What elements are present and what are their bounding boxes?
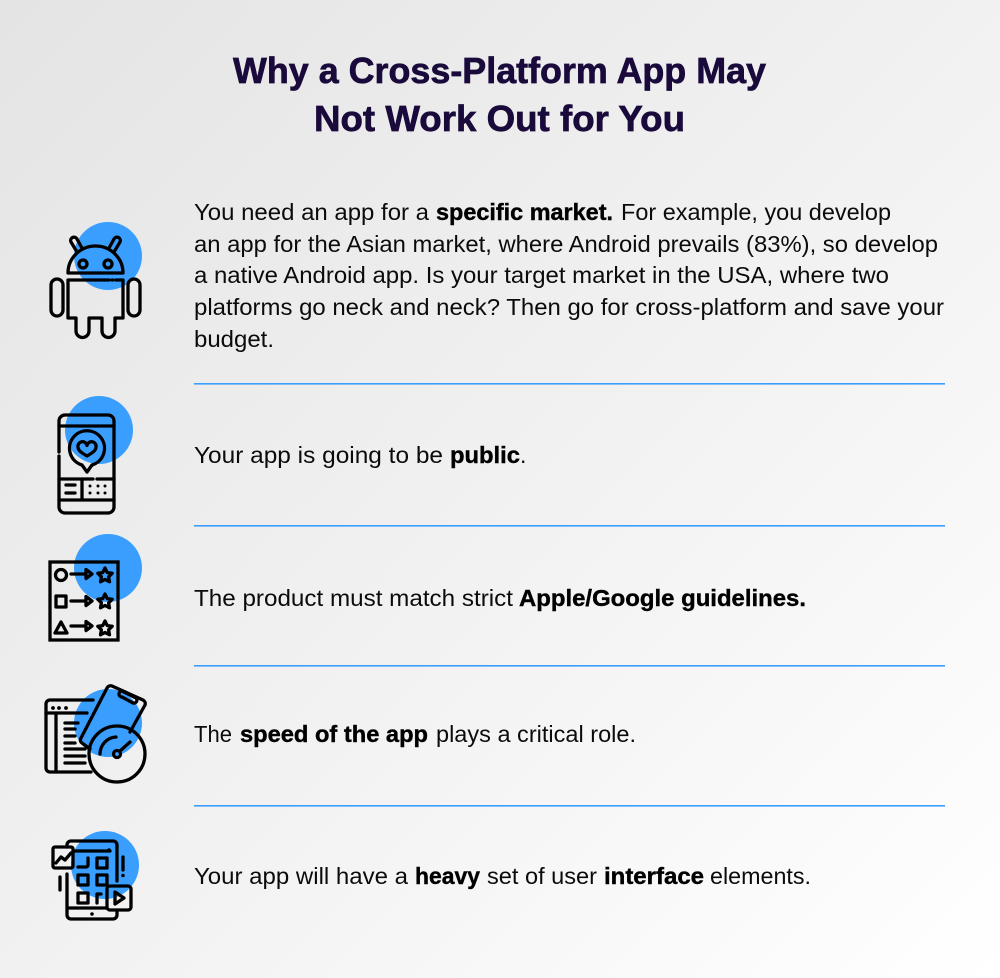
text: guidelines: The product must match strict [194, 585, 514, 611]
title: Why a Cross-Platform App May [233, 50, 767, 91]
text: interface elements: interface [604, 863, 704, 889]
text: guidelines: Apple/Google guidelines. [519, 585, 806, 611]
text: specific market: specific market. [436, 199, 613, 225]
text: guidelines [194, 585, 806, 611]
text: specific market: an app for the Asian market, where Android prevails (83%), so develop [194, 231, 938, 257]
text: public: public [450, 442, 520, 468]
icon: window, phone and speed gauge [46, 686, 145, 782]
icon: app interface elements [53, 831, 139, 919]
text: interface elements: Your app will have a [194, 863, 408, 889]
text: specific market: For example, you develop [621, 199, 891, 225]
title: Not Work Out for You [314, 98, 685, 139]
icon: phone with heart bubble [59, 396, 133, 513]
text: public: Your app is going to be [194, 442, 443, 468]
text: specific market: platforms go neck and neck? Then go for cross-platform and save your [194, 294, 944, 320]
text: speed of the app: speed of the app [240, 721, 428, 747]
text: speed of the app [194, 721, 636, 747]
text: interface elements: set of user [487, 863, 597, 889]
text: interface elements: elements. [710, 863, 811, 889]
text: speed of the app: plays a critical role. [436, 721, 636, 747]
icon: android robot [51, 222, 142, 338]
icon: shape to star checklist [50, 534, 142, 640]
text: interface elements [194, 863, 811, 889]
text: specific market [194, 199, 944, 352]
text: speed of the app: The [194, 721, 232, 747]
text: specific market: You need an app for a [194, 199, 429, 225]
text: interface elements: heavy [415, 863, 480, 889]
title [233, 50, 767, 139]
text: public: . [520, 442, 526, 468]
text: specific market: a native Android app. Is your target market in the USA, where two [194, 262, 889, 288]
text: specific market: budget. [194, 326, 274, 352]
